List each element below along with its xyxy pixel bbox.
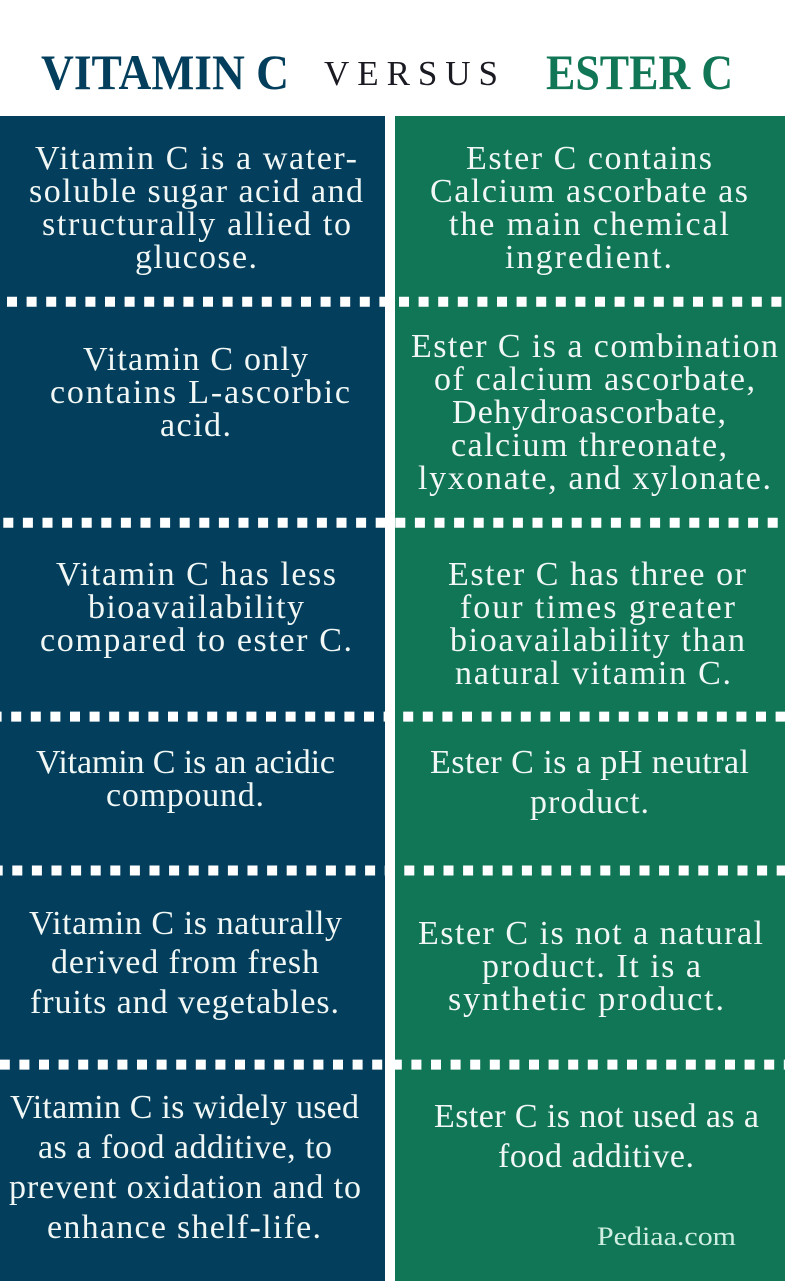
text: Ester C bioavailability xyxy=(448,556,747,692)
text: Ester C composition: Ester C is a combination xyxy=(411,328,778,365)
title: versus: VERSUS xyxy=(324,54,498,93)
text: Vitamin C source: fruits and vegetables. xyxy=(30,984,339,1021)
text: Vitamin C acidity xyxy=(36,744,335,814)
text: Vitamin C uses xyxy=(9,1089,361,1246)
text: Vitamin C uses: prevent oxidation and to xyxy=(9,1169,361,1206)
text: Ester C uses xyxy=(434,1098,759,1175)
text: Vitamin C bioavailability xyxy=(40,556,352,659)
text: Vitamin C uses: as a food additive, to xyxy=(38,1129,332,1166)
text: Ester C bioavailability: four times greater xyxy=(460,589,736,626)
text: Ester C acidity xyxy=(430,744,749,821)
text: Vitamin C chemical nature: Vitamin C is a water- xyxy=(35,140,357,177)
text: Vitamin C chemical nature xyxy=(29,140,363,276)
text: Ester C uses: food additive. xyxy=(498,1138,694,1175)
text: Ester C composition xyxy=(411,328,778,497)
text: Ester C chemical nature: ingredient. xyxy=(505,239,672,276)
text: Vitamin C source: Vitamin C is naturally xyxy=(29,905,342,942)
text: Ester C acidity: product. xyxy=(530,784,649,821)
text: Ester C source xyxy=(418,915,763,1018)
text: Vitamin C source: derived from fresh xyxy=(51,944,319,981)
text: Vitamin C uses: enhance shelf-life. xyxy=(47,1209,321,1246)
text: Ester C chemical nature: Calcium ascorbate as xyxy=(430,173,748,210)
text: Vitamin C acidity: compound. xyxy=(106,777,264,814)
text: Vitamin C source xyxy=(29,905,342,1021)
panel: Vitamin C column xyxy=(0,116,385,1281)
text: Ester C chemical nature: Ester C contains xyxy=(466,140,712,177)
text: Ester C bioavailability: Ester C has three or xyxy=(448,556,747,593)
text: Vitamin C composition: contains L-ascorbic xyxy=(50,374,350,411)
text: Ester C bioavailability: natural vitamin C. xyxy=(455,655,731,692)
text: Vitamin C chemical nature: soluble sugar acid and xyxy=(29,173,363,210)
title: Ester C: ESTER C xyxy=(546,44,733,100)
text: Ester C source: product. It is a xyxy=(482,948,701,985)
text: Vitamin C acidity: Vitamin C is an acidic xyxy=(36,744,335,781)
text: Ester C composition: calcium threonate, xyxy=(451,427,727,464)
text: Vitamin C bioavailability: Vitamin C has less xyxy=(56,556,336,593)
text: Ester C source: Ester C is not a natural xyxy=(418,915,763,952)
panel: Ester C column xyxy=(395,116,785,1281)
text: Vitamin C chemical nature: structurally allied to xyxy=(42,206,351,243)
text: Vitamin C bioavailability: compared to ester C. xyxy=(40,622,352,659)
text: Ester C composition: lyxonate, and xylonate. xyxy=(418,460,771,497)
text: Vitamin C composition: acid. xyxy=(160,407,231,444)
text: Ester C uses: Ester C is not used as a xyxy=(434,1098,759,1135)
text: Ester C chemical nature: the main chemical xyxy=(449,206,729,243)
text: Vitamin C bioavailability: bioavailability xyxy=(88,589,304,626)
text: Ester C chemical nature xyxy=(430,140,748,276)
row dividers xyxy=(0,302,785,1065)
text: Vitamin C composition xyxy=(50,341,350,444)
text: Vitamin C chemical nature: glucose. xyxy=(135,239,257,276)
title: Vitamin C: VITAMIN C xyxy=(41,44,289,100)
text: Ester C acidity: Ester C is a pH neutral xyxy=(430,744,749,781)
watermark: Pediaa.com: Pediaa.com xyxy=(597,1222,736,1251)
text: Ester C composition: of calcium ascorbate, xyxy=(434,361,755,398)
text: Vitamin C uses: Vitamin C is widely used xyxy=(10,1089,359,1126)
text: Vitamin C composition: Vitamin C only xyxy=(83,341,308,378)
text: Ester C composition: Dehydroascorbate, xyxy=(452,394,726,431)
text: Ester C bioavailability: bioavailability than xyxy=(450,622,745,659)
text: Ester C source: synthetic product. xyxy=(448,981,724,1018)
